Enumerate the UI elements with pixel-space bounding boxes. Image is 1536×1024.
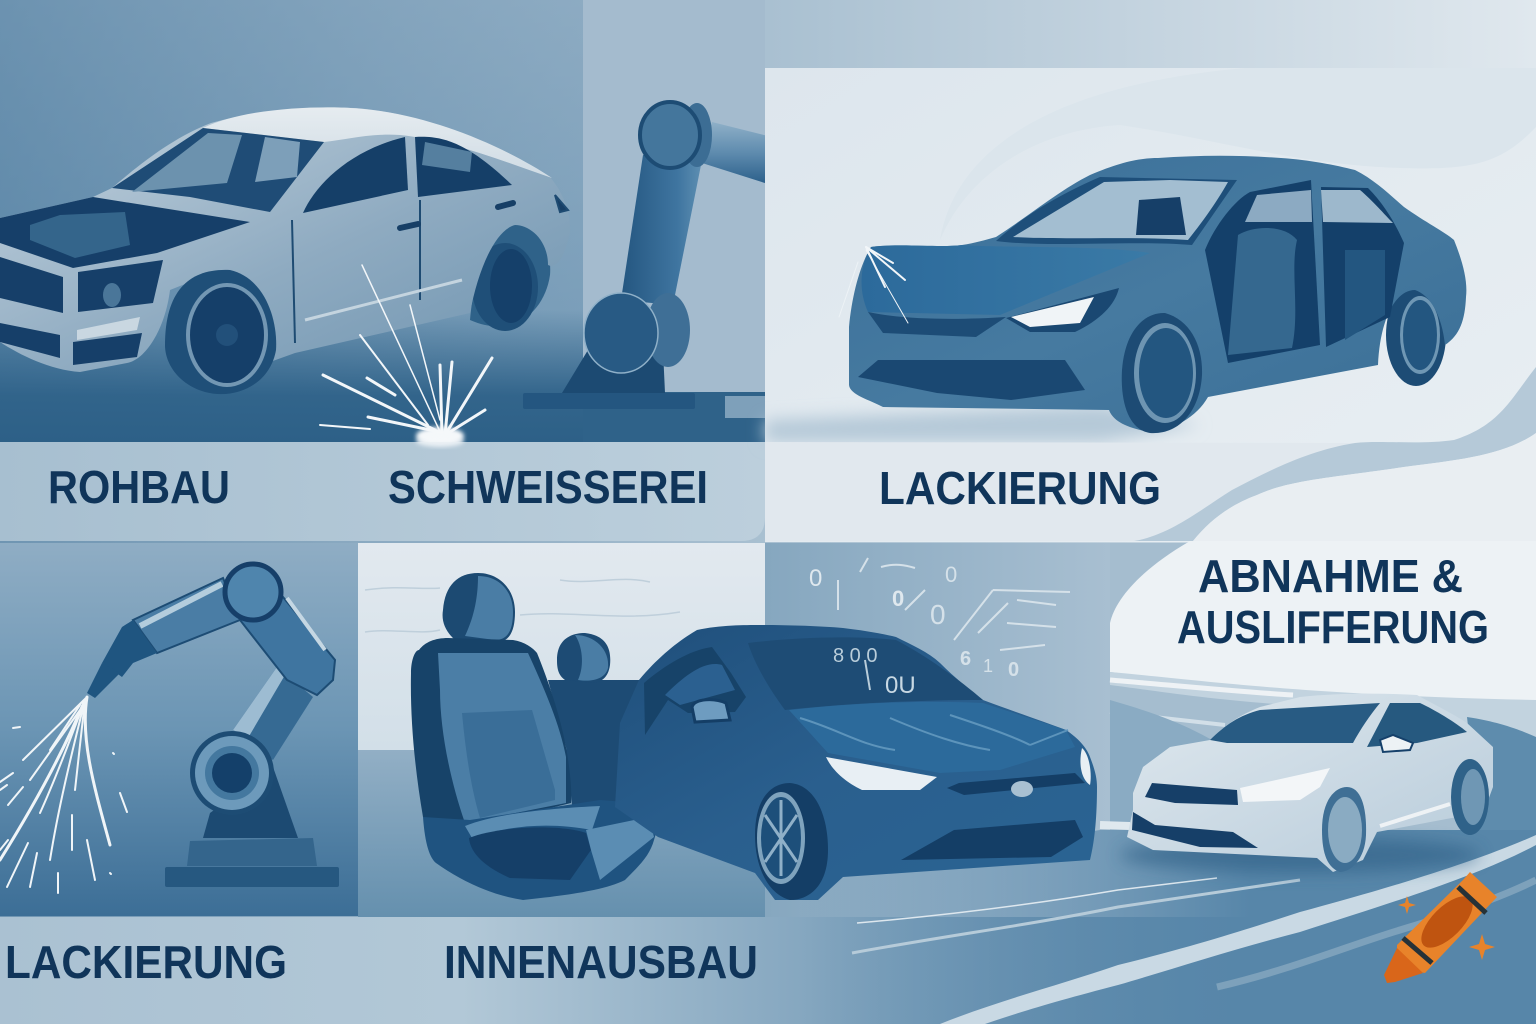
label: Abnahme und Auslieferung: [1177, 550, 1489, 653]
panel: interior scene: [358, 543, 765, 917]
hud overlay: [833, 645, 916, 699]
car body: [1127, 694, 1493, 872]
label: Rohbau: ROHBAU: [48, 461, 230, 513]
front door opening: [1205, 180, 1320, 363]
wrist and nozzle: [795, 148, 863, 243]
lower intake: [1132, 812, 1258, 848]
label: Lackierung bottom: LACKIERUNG: [5, 936, 287, 988]
data overlay symbols: 1: [983, 656, 993, 676]
top joint: [225, 564, 281, 620]
upper arm: [133, 578, 240, 653]
seat cushion: [423, 800, 659, 900]
forearm: [240, 597, 335, 695]
hud overlay: 8 0 0: [833, 645, 877, 667]
label band: rohbau and schweisserei: [0, 442, 765, 541]
data overlay symbols: 0: [930, 599, 946, 630]
label: Innenausbau: INNENAUSBAU: [444, 936, 758, 988]
hood reflections: [800, 715, 1068, 750]
base: [523, 350, 695, 409]
data overlay symbols: 6: [960, 648, 971, 670]
windshield: [748, 637, 983, 710]
door lines and handles: [292, 195, 568, 343]
headrest: [443, 573, 515, 642]
label: Schweisserei: SCHWEISSEREI: [388, 461, 708, 513]
robot arm: welding: [523, 102, 863, 409]
headlight: [1240, 768, 1330, 802]
base joint: [190, 731, 274, 815]
data overlay symbols: 0: [945, 562, 957, 587]
windshield: [112, 128, 324, 212]
front wheel: [755, 783, 828, 900]
cushion bolster: [586, 817, 654, 880]
front wheel: [1322, 787, 1366, 872]
lower intake: [901, 820, 1083, 860]
side windows: [1367, 703, 1467, 747]
rear door opening: [1321, 187, 1404, 347]
side windows: [303, 137, 512, 213]
upper arm: [621, 155, 702, 305]
sparks overlap on band: [416, 435, 464, 447]
car seat: [411, 573, 659, 900]
headlights: [826, 748, 1091, 790]
panel: paint robot scene: [0, 543, 358, 916]
lower label band: [0, 917, 1536, 1024]
cushion center: [469, 827, 591, 880]
headlight: [1006, 288, 1119, 332]
lower intake: [858, 360, 1085, 400]
cushion left bolster: [465, 806, 600, 838]
front wheel: [165, 270, 276, 394]
hud overlay: 0U: [885, 672, 916, 699]
windshield: [996, 177, 1237, 245]
hood: [862, 245, 1150, 315]
nozzle: [87, 663, 120, 698]
roof: [203, 107, 552, 178]
panel: paint shop scene: [765, 68, 1536, 542]
mirror: [692, 700, 730, 722]
wrist: [102, 620, 157, 677]
rear wheel: [470, 220, 550, 331]
panel: rohbau and welding scene: [0, 0, 765, 442]
mirror: [1380, 735, 1413, 752]
pedestal: [203, 767, 298, 838]
paint spray on hood: [839, 247, 908, 323]
rear wheel: [1386, 284, 1446, 386]
rear headrest: [557, 633, 610, 683]
robot arm: painting: [87, 564, 339, 887]
hood: [789, 702, 1075, 773]
label: Lackierung top: LACKIERUNG: [879, 462, 1161, 514]
car: interior stage: [615, 625, 1097, 900]
welding sparks: [320, 265, 492, 445]
front wheel: [1122, 313, 1202, 433]
windshield: [1210, 703, 1380, 743]
seat back insert: [438, 653, 566, 823]
car body: [0, 107, 570, 372]
car body: [615, 625, 1097, 900]
panel: data and delivery background: [765, 541, 1536, 917]
grille: [868, 312, 1006, 337]
data overlay symbols: 0: [809, 565, 822, 592]
front fascia: [0, 257, 163, 365]
paint spray: [0, 697, 127, 893]
car: finished white: [1120, 694, 1493, 873]
icon: crayon: [1384, 872, 1497, 983]
data overlay symbols: 0: [892, 586, 904, 611]
side window: [644, 647, 746, 735]
label: Abnahme und Auslieferung: ABNAHME &: [1198, 550, 1463, 602]
lower arm: [233, 667, 313, 760]
sill: [1380, 804, 1450, 826]
data overlay symbols: 0: [1008, 659, 1019, 681]
upper grille: [1145, 783, 1238, 805]
car: bare body shell: [0, 107, 570, 394]
data overlay symbols: [809, 558, 1070, 681]
forearm: [702, 122, 797, 184]
base plate: [165, 867, 339, 887]
rear wheel: [1451, 759, 1489, 835]
road with curves: [800, 825, 1536, 1024]
seat back center panel: [462, 710, 555, 818]
label: Abnahme und Auslieferung: AUSLIFFERUNG: [1177, 601, 1489, 653]
engine bay: [0, 197, 250, 268]
rear seat back: [548, 680, 650, 810]
car body: [849, 156, 1466, 431]
elbow joint: [584, 293, 690, 373]
car: painted blue: [839, 156, 1466, 433]
block: [187, 838, 317, 866]
grille and emblem: [947, 773, 1085, 797]
shadow: [1120, 837, 1480, 873]
shoulder joint: [640, 102, 712, 168]
seat back: [411, 638, 571, 835]
